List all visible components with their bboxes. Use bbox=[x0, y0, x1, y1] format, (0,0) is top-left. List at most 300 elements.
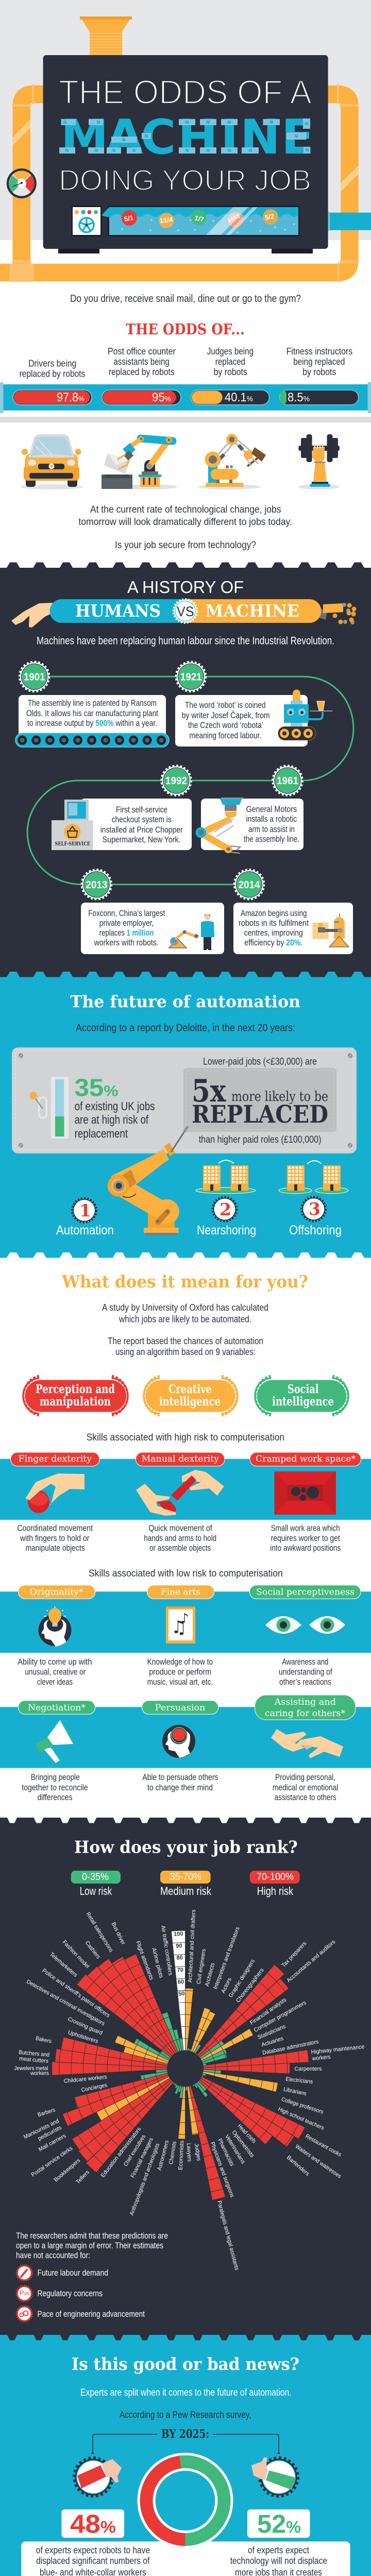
job labels: Bookkeepers bbox=[53, 2157, 82, 2183]
conveyor belt bbox=[15, 733, 169, 747]
deloitte intro: According to a report by Deloitte, in the next 20 years: bbox=[76, 1023, 295, 1034]
caveats text: open to a large margin of error. Their estimates bbox=[16, 2241, 163, 2250]
icon: offshoring buildings bbox=[279, 1161, 348, 1194]
legend: medium risk: 35-70% bbox=[170, 1872, 201, 1883]
caveat: future labour demand bbox=[16, 2265, 108, 2281]
oxford study text bbox=[102, 1302, 268, 1357]
two-line chart labels: Manicurists and bbox=[23, 2118, 60, 2140]
job labels: Interpreters and translators bbox=[212, 1926, 241, 1990]
low risk descriptions 1: Knowledge of how to bbox=[147, 1657, 213, 1667]
caveats text bbox=[16, 2231, 168, 2260]
closing odds text bbox=[78, 504, 292, 528]
pill: negotiation: Negotiation* bbox=[28, 1703, 86, 1713]
icon: thumbs down gear bbox=[74, 2458, 122, 2497]
low risk descriptions 1: understanding of bbox=[279, 1667, 332, 1677]
legend: high risk: High risk bbox=[257, 1885, 294, 1897]
year gear 2013: 2013 bbox=[86, 879, 107, 891]
low risk descriptions 1: music, visual art, etc. bbox=[147, 1677, 213, 1687]
job labels: Tellers bbox=[75, 2169, 91, 2185]
low risk descriptions 1: produce or perform bbox=[149, 1667, 211, 1677]
card 2013: private employer, bbox=[99, 918, 154, 928]
high risk descriptions: requires worker to get bbox=[271, 1533, 340, 1543]
card 1961: arm to assist in bbox=[248, 824, 295, 834]
pill: social: intelligence bbox=[272, 1395, 334, 1409]
scale numbers: 70 bbox=[177, 1967, 183, 1974]
pill: finger dexterity: Finger dexterity bbox=[19, 1454, 92, 1464]
card 1901 bbox=[19, 695, 166, 739]
job labels: Upholsterers bbox=[67, 2029, 99, 2045]
icon: car bbox=[20, 434, 83, 489]
job labels: Computer programmers bbox=[253, 1999, 308, 2033]
year gear 2013 bbox=[81, 870, 111, 900]
step 1: automation bbox=[56, 1198, 114, 1238]
card 2013: workers with robots. bbox=[94, 938, 159, 947]
band: low risk skills 1 bbox=[0, 1585, 371, 1653]
odds column labels: replaced by robots bbox=[109, 367, 175, 377]
job labels: Mail carriers bbox=[38, 2132, 68, 2153]
timeline: 1992 bbox=[52, 766, 192, 850]
scale numbers: 60 bbox=[178, 1979, 184, 1986]
icon: human hand bbox=[11, 603, 53, 628]
job labels: Electricians bbox=[285, 2076, 313, 2085]
odds column labels: Fitness instructors bbox=[286, 346, 352, 357]
scale numbers bbox=[174, 1931, 187, 1997]
low risk descriptions 1 bbox=[18, 1657, 332, 1687]
heading: good or bad news: Is this good or bad news? bbox=[72, 2354, 299, 2374]
icon: thumbs up gear bbox=[251, 2458, 298, 2497]
pill: assisting and caring: Assisting and bbox=[274, 1697, 336, 1707]
odds column labels: assistants being bbox=[113, 357, 170, 367]
gauge: drivers 97.8%: 97.8% bbox=[57, 391, 85, 404]
caveat: regulatory concerns: P45 bbox=[20, 2289, 29, 2297]
icon: framed music: ♪ bbox=[180, 1611, 189, 1626]
odds column labels: replaced bbox=[215, 357, 245, 367]
job labels: Flight attendants bbox=[134, 1940, 155, 1981]
heading: the odds of: THE ODDS OF... bbox=[126, 320, 245, 338]
job labels: Detectives and criminal investigators bbox=[25, 1978, 106, 2027]
step 2: nearshoring: Nearshoring bbox=[197, 1223, 256, 1238]
heading: future of automation: The future of automation bbox=[70, 992, 300, 1011]
lottery ball tube: 5/2 bbox=[264, 212, 275, 222]
two-line chart labels: Jewelers metal bbox=[14, 2065, 48, 2072]
legend: high risk: 70-100% bbox=[257, 1872, 294, 1883]
icon: caring hands bbox=[271, 1729, 343, 1758]
icon: big robot arm bbox=[108, 1126, 188, 1235]
low risk descriptions 1: unusual, creative or bbox=[25, 1667, 86, 1677]
oxford study text: which jobs are likely to be automated. bbox=[119, 1314, 251, 1325]
stat 35%: of existing UK jobs bbox=[75, 1099, 155, 1113]
job labels: Librarians bbox=[283, 2086, 307, 2097]
year gear 1961 bbox=[273, 766, 302, 795]
pill: persuasion bbox=[142, 1701, 218, 1714]
icon: dumbbell robot bbox=[298, 434, 340, 489]
job labels: Lawyers bbox=[185, 2143, 193, 2162]
icon: post robot bbox=[102, 436, 177, 489]
higher paid text: than higher paid roles (£100,000) bbox=[199, 1134, 322, 1145]
caveats text: The researchers admit that these predictions are bbox=[16, 2231, 168, 2241]
pill: manual dexterity: Manual dexterity bbox=[142, 1454, 219, 1464]
job labels: Restaurant cooks bbox=[305, 2133, 343, 2158]
card 1992: Supermarket, New York. bbox=[103, 835, 180, 844]
card 1901: to increase output by 500% within a year. bbox=[27, 718, 157, 728]
job labels: High school teachers bbox=[277, 2106, 325, 2131]
plate: 5x more likely: 5x bbox=[192, 1073, 227, 1109]
experts intro: Experts are split when it comes to the future of automation. bbox=[80, 2387, 292, 2398]
card 2014: efficiency by 20%. bbox=[244, 938, 302, 947]
icon: cramped box bbox=[275, 1471, 336, 1515]
job labels: Economists bbox=[178, 2140, 185, 2170]
expert descriptions: of experts expect bbox=[248, 2545, 309, 2555]
year gear 1992: 1992 bbox=[165, 775, 187, 787]
heading: what does it mean: What does it mean for you? bbox=[61, 1272, 308, 1292]
pill: assisting and caring: caring for others* bbox=[265, 1708, 345, 1719]
job labels: Database adminstrators bbox=[262, 2039, 319, 2056]
job labels: Cashiers bbox=[84, 1940, 102, 1960]
card 1961: General Motors bbox=[246, 804, 297, 814]
low risk descriptions 2: assistance to others bbox=[275, 1792, 336, 1802]
job labels: Optometrists bbox=[231, 2129, 256, 2159]
lottery ball tube: 11/4 bbox=[159, 215, 174, 225]
icon: nearshoring buildings bbox=[196, 1160, 256, 1194]
plate: 5x more likely: REPLACED bbox=[192, 1100, 328, 1129]
oxford study text: A study by University of Oxford has calculated bbox=[102, 1302, 268, 1313]
job labels: Financial managers bbox=[130, 2137, 155, 2179]
icon: self-service kiosk bbox=[52, 800, 93, 850]
year gear 1961: 1961 bbox=[277, 775, 298, 787]
machine pipes bbox=[0, 84, 371, 282]
card 1992 bbox=[80, 799, 192, 850]
job labels: Crossing guard bbox=[67, 2016, 104, 2036]
year gear 1921: 1921 bbox=[180, 672, 202, 683]
card 1921: the Czech word ‘robota’ bbox=[188, 720, 263, 730]
risk legend bbox=[71, 1871, 300, 1897]
job labels: Astronomers bbox=[157, 2140, 170, 2171]
question: Is your job secure from technology? bbox=[115, 540, 256, 551]
pill: social perceptiveness bbox=[249, 1585, 361, 1599]
low risk descriptions 2: together to reconcile bbox=[22, 1783, 88, 1792]
card 1992: installed at Price Chopper bbox=[100, 825, 183, 835]
job labels: Bartenders bbox=[285, 2155, 311, 2177]
title: DOING YOUR JOB bbox=[59, 164, 311, 197]
card 1961 bbox=[201, 799, 303, 850]
high risk descriptions: or assemble objects bbox=[149, 1543, 211, 1553]
caveat: future labour demand: Future labour demand bbox=[37, 2268, 108, 2278]
pill: perception bbox=[23, 1377, 128, 1415]
icon: hands with block bbox=[136, 1470, 224, 1516]
timeline: 1921 bbox=[175, 662, 332, 747]
step 2: nearshoring: 2 bbox=[220, 1199, 231, 1219]
stat: 52% bbox=[247, 2510, 310, 2538]
job labels: Education administrators bbox=[99, 2126, 143, 2179]
odds column labels: replaced by robots bbox=[20, 369, 85, 379]
job labels: Air traffic controllers bbox=[160, 1925, 174, 1976]
high risk descriptions: Small work area which bbox=[271, 1523, 340, 1533]
high risk descriptions: into awkward positions bbox=[270, 1543, 341, 1553]
pill: perception: Perception and bbox=[36, 1382, 115, 1396]
stat: 48%: 48% bbox=[70, 2510, 116, 2538]
odds column labels: by robots bbox=[302, 367, 336, 377]
experts intro bbox=[80, 2387, 292, 2420]
pill: creative: intelligence bbox=[159, 1395, 221, 1409]
pill: originality: Originality* bbox=[29, 1587, 84, 1598]
lottery ball tube: 1/7 bbox=[194, 214, 205, 224]
title: MACHINE bbox=[61, 109, 314, 165]
heading: high risk skills: Skills associated with high risk to computerisation bbox=[87, 1432, 284, 1443]
gauge: judges 40.1%: 40.1% bbox=[225, 391, 253, 404]
card 1961: installs a robotic bbox=[246, 814, 297, 824]
job labels: Pharmacists bbox=[216, 2138, 235, 2167]
gauge: fitness 8.5%: 8.5% bbox=[288, 391, 310, 404]
gauge: drivers 97.8% bbox=[13, 390, 92, 405]
two-line chart labels: meat cutters bbox=[19, 2056, 49, 2064]
legend: medium risk bbox=[160, 1871, 212, 1897]
card 2014: robots in its fulfilment bbox=[239, 918, 309, 928]
odds column labels: Judges being bbox=[207, 346, 254, 357]
timeline line bbox=[27, 676, 353, 885]
icon: robot hand bbox=[313, 603, 357, 624]
caveat: pace of engineering: Pace of engineering advancement bbox=[37, 2309, 145, 2319]
heading: how does your job rank: How does your job rank? bbox=[74, 1837, 298, 1857]
pill: social: Social bbox=[288, 1382, 319, 1396]
job labels: Telemarketers bbox=[48, 1951, 79, 1978]
job labels: Carpenters bbox=[295, 2066, 322, 2072]
two-line chart labels: workers bbox=[30, 2071, 49, 2077]
low risk descriptions 2: to change their mind bbox=[147, 1783, 213, 1792]
band: low risk skills 2 bbox=[0, 1695, 371, 1768]
low risk descriptions 2: Bringing people bbox=[31, 1772, 80, 1782]
legend: low risk: Low risk bbox=[80, 1885, 112, 1897]
job labels: Waiters and waitresses bbox=[294, 2143, 343, 2180]
icon: judge robot bbox=[198, 434, 266, 489]
by 2025 bracket bbox=[92, 2427, 280, 2454]
job labels: Architectural and civil drafters bbox=[187, 1909, 197, 1983]
stat 35%: 35% bbox=[75, 1075, 119, 1102]
job labels: Actuaries bbox=[261, 2036, 284, 2048]
expert descriptions: technology will not displace bbox=[230, 2556, 327, 2566]
card 2014: Amazon begins using bbox=[241, 908, 307, 918]
icon: waiter robot bbox=[278, 689, 332, 740]
job labels: Judges bbox=[193, 2143, 202, 2161]
job labels: Chief executives bbox=[123, 2133, 147, 2167]
step 1: automation: 1 bbox=[79, 1200, 91, 1221]
job labels: Physicians and surgeons bbox=[209, 2141, 235, 2198]
scale numbers: 100 bbox=[174, 1931, 183, 1938]
pill: originality bbox=[18, 1585, 95, 1599]
year gear 1921 bbox=[176, 662, 206, 691]
lottery ball tube: 100/1 bbox=[227, 213, 241, 224]
pill: creative: Creative bbox=[168, 1382, 212, 1396]
card 1921: meaning forced labour. bbox=[189, 731, 261, 740]
pill: finger dexterity bbox=[11, 1452, 99, 1466]
icon: warehouse robot bbox=[312, 913, 349, 947]
high risk descriptions: Coordinated movement bbox=[18, 1523, 93, 1533]
two-line chart labels: pedicurists bbox=[37, 2124, 63, 2142]
scale numbers: 50 bbox=[178, 1991, 185, 1997]
step 2: nearshoring bbox=[196, 1160, 256, 1238]
odds percentage band bbox=[0, 382, 371, 422]
plate: 5x more likely: more likely to be bbox=[231, 1089, 328, 1105]
job labels: Police and sheriff’s patrol officers bbox=[41, 1968, 111, 2019]
pill: persuasion: Persuasion bbox=[155, 1703, 206, 1713]
pill: manual dexterity bbox=[136, 1452, 225, 1466]
job labels: Fashion model bbox=[61, 1939, 91, 1970]
band: high risk skills bbox=[0, 1452, 371, 1520]
donut chart: 48 vs 52 bbox=[137, 2453, 233, 2549]
two-line chart labels: Butchers and bbox=[19, 2049, 50, 2058]
title bbox=[59, 73, 314, 197]
card 1921: The word ‘robot’ is coined bbox=[185, 700, 266, 710]
odds column labels: by robots bbox=[214, 367, 247, 377]
pill: perception: manipulation bbox=[40, 1395, 111, 1409]
job labels: Anthropologists and archeologists bbox=[129, 2142, 161, 2216]
icon: finger hand with ball bbox=[26, 1473, 85, 1513]
card 2014 bbox=[233, 903, 353, 954]
humans vs machine banner: HUMANS bbox=[75, 601, 161, 621]
job labels: Childcare workers bbox=[63, 2074, 107, 2084]
year gear 2014 bbox=[234, 870, 264, 900]
washing machine panel bbox=[72, 206, 102, 236]
intro question: Do you drive, receive snail mail, dine out or go to the gym? bbox=[70, 293, 301, 304]
year gear 1901 bbox=[20, 662, 49, 691]
year gear 1901: 1901 bbox=[24, 672, 45, 683]
high risk descriptions: hands and arms to hold bbox=[144, 1533, 216, 1543]
icon: head with lightbulb bbox=[38, 1606, 71, 1647]
high risk descriptions: Quick movement of bbox=[148, 1523, 212, 1533]
year gear 2014: 2014 bbox=[238, 879, 260, 891]
pill: fine arts: Fine arts bbox=[161, 1587, 200, 1598]
white info box bbox=[21, 2541, 350, 2576]
low risk descriptions 1: Awareness and bbox=[282, 1657, 328, 1667]
lottery ball tube bbox=[102, 206, 300, 236]
low risk descriptions 1: clever ideas bbox=[37, 1677, 73, 1687]
title: THE ODDS OF A bbox=[59, 73, 312, 111]
icon: eyes bbox=[265, 1616, 345, 1634]
by 2025 bracket: BY 2025: bbox=[161, 2427, 209, 2441]
oxford study text: using an algorithm based on 9 variables: bbox=[115, 1347, 256, 1357]
legend: medium risk: Medium risk bbox=[160, 1885, 212, 1897]
card 2013 bbox=[81, 903, 224, 954]
variable pills bbox=[23, 1377, 348, 1415]
job labels: Barbers bbox=[37, 2107, 56, 2118]
job labels: College professors bbox=[280, 2096, 325, 2115]
lottery ball tube: 5/1 bbox=[124, 214, 134, 223]
scale numbers: 90 bbox=[176, 1943, 182, 1950]
card 1901: The assembly line is patented by Ransom bbox=[28, 698, 157, 708]
job labels: Accountants and auditors bbox=[285, 1939, 337, 1984]
job labels: Veterinarians bbox=[224, 2133, 246, 2165]
experts intro: According to a Pew Research survey, bbox=[120, 2410, 251, 2420]
step 1: automation: Automation bbox=[56, 1223, 114, 1238]
legend: high risk bbox=[250, 1871, 300, 1897]
vs gear bbox=[173, 599, 197, 623]
job labels: Actors bbox=[220, 1976, 233, 1994]
machine cabinet bbox=[43, 55, 328, 253]
job labels: Paralegals and legal assistants bbox=[216, 2200, 240, 2271]
job labels: Tax preparers bbox=[280, 1940, 308, 1969]
job labels: Postal service clerks bbox=[30, 2145, 74, 2178]
two-line chart labels: workers bbox=[311, 2054, 331, 2062]
card 1992: First self-service bbox=[116, 805, 167, 815]
stat 35%: replacement bbox=[75, 1127, 128, 1140]
job labels: Bakers bbox=[35, 2036, 52, 2045]
stat 35%: are at high risk of bbox=[75, 1113, 149, 1126]
card 1921: by writer Josef Čapek, from bbox=[182, 710, 270, 720]
step 3: offshoring: 3 bbox=[309, 1199, 321, 1219]
card 1921 bbox=[175, 695, 308, 747]
two-line chart labels: Highway maintenance bbox=[311, 2044, 365, 2056]
step 3: offshoring: Offshoring bbox=[289, 1223, 342, 1238]
low risk descriptions 1: Ability to come up with bbox=[18, 1657, 92, 1667]
closing odds text: tomorrow will look dramatically different to jobs today. bbox=[78, 517, 292, 528]
high risk descriptions bbox=[18, 1523, 341, 1553]
scale bar bbox=[171, 1930, 192, 2069]
chart: radial job automation risk bbox=[25, 1909, 343, 2271]
card 1992: checkout system is bbox=[112, 815, 172, 824]
caveat: regulatory concerns: Regulatory concerns bbox=[37, 2289, 103, 2298]
job labels bbox=[25, 1909, 343, 2271]
plate: 5x more likely bbox=[183, 1068, 336, 1132]
caveat: regulatory concerns bbox=[16, 2285, 103, 2301]
humans vs machine banner bbox=[11, 599, 357, 628]
job labels: Chemists bbox=[168, 2141, 178, 2165]
odds column labels: Post office counter bbox=[108, 346, 176, 357]
pill: fine arts bbox=[147, 1585, 214, 1599]
expert descriptions: of experts expect robots to have bbox=[36, 2545, 150, 2555]
gauge icon bbox=[7, 168, 37, 198]
timeline: 2014 bbox=[233, 870, 353, 954]
icon: framed music: ♫ bbox=[171, 1617, 187, 1638]
lower-paid text: Lower-paid jobs (<£30,000) are bbox=[203, 1057, 317, 1067]
job labels: Retail salespersons bbox=[85, 1911, 114, 1954]
job labels: Graphic designers bbox=[228, 1958, 256, 1998]
job labels: Civil engineers bbox=[196, 1948, 207, 1985]
gauge: post office 95%: 95% bbox=[152, 391, 171, 404]
job labels: Choreographers bbox=[235, 1967, 265, 2004]
gauge: post office 95% bbox=[102, 390, 181, 405]
icon: megaphone bbox=[36, 1720, 74, 1763]
expert descriptions bbox=[36, 2545, 327, 2576]
scale numbers: 80 bbox=[176, 1955, 183, 1961]
job labels: Head chefs bbox=[237, 2123, 257, 2145]
stat 35% bbox=[75, 1075, 155, 1140]
gauge lever bbox=[29, 1092, 46, 1118]
odds column labels bbox=[20, 346, 352, 379]
card 2014: centres, improving bbox=[244, 928, 303, 938]
pill: creative bbox=[144, 1377, 238, 1415]
low risk descriptions 2 bbox=[22, 1772, 338, 1802]
pill: negotiation bbox=[18, 1701, 95, 1714]
oxford study text: The report based the chances of automation bbox=[108, 1336, 263, 1346]
stat: 52%: 52% bbox=[257, 2510, 301, 2538]
caveat: pace of engineering bbox=[16, 2306, 145, 2321]
pill: cramped work space: Cramped work space* bbox=[256, 1454, 356, 1464]
vs gear: VS bbox=[177, 604, 194, 619]
machine chimney bbox=[80, 16, 132, 56]
expert descriptions: displaced significant numbers of bbox=[36, 2556, 150, 2566]
two-line chart labels bbox=[14, 2044, 365, 2142]
job labels: Airline pilots bbox=[150, 1947, 164, 1979]
card 1961: the assembly line. bbox=[244, 834, 299, 844]
caveats text: have not accounted for: bbox=[16, 2250, 90, 2260]
step 3: offshoring bbox=[279, 1161, 348, 1238]
high risk descriptions: manipulate objects bbox=[26, 1543, 85, 1553]
low risk descriptions 2: Providing personal, bbox=[275, 1772, 335, 1782]
low risk descriptions 2: medical or emotional bbox=[273, 1783, 338, 1792]
job labels: Architects bbox=[204, 1962, 216, 1987]
icon: framed music bbox=[166, 1606, 195, 1643]
odds column labels: being replaced bbox=[293, 357, 345, 367]
heading: a history of: A HISTORY OF bbox=[127, 578, 244, 597]
